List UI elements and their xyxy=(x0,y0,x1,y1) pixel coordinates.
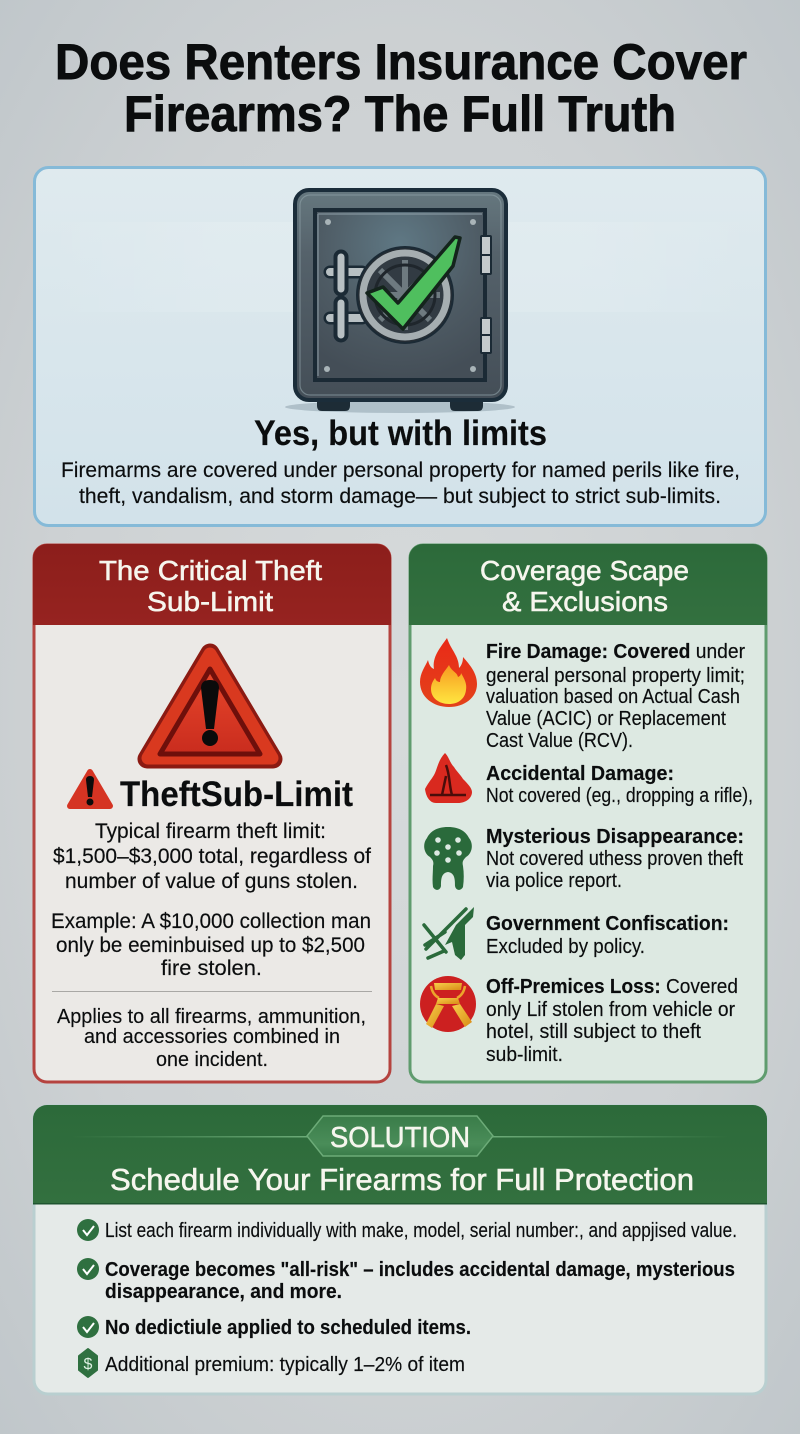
item: off-premises loss xyxy=(420,976,738,1066)
text block: coverage summary: Firemarms are covered under personal property for named perils like fire, xyxy=(61,458,740,482)
icon: broken rifle flame xyxy=(425,753,472,803)
icon: check xyxy=(77,1258,99,1280)
text block: coverage summary xyxy=(61,458,740,508)
icon: check xyxy=(77,1316,99,1338)
item: mysterious disappearance xyxy=(424,826,744,892)
text block: example: only be eeminbuised up to $2,500 xyxy=(56,934,365,957)
icon: large warning triangle xyxy=(147,653,273,759)
panel: solution xyxy=(33,1105,767,1394)
text block: applies to all: and accessories combined in xyxy=(84,1026,340,1048)
text block: typical limit xyxy=(53,820,371,893)
icon: crossed rifle xyxy=(424,907,474,960)
item: mysterious disappearance: via police report. xyxy=(486,870,622,892)
list item: all-risk coverage xyxy=(77,1258,735,1303)
text block: example xyxy=(51,910,371,980)
text block: typical limit: Typical firearm theft limit: xyxy=(95,820,326,843)
item: fire damage: Cast Value (RCV). xyxy=(486,730,633,752)
title: Does Renters Insurance Cover xyxy=(55,34,747,90)
icon: dollar badge xyxy=(79,1349,97,1377)
panel: coverage scope and exclusions xyxy=(409,544,767,1082)
heading: coverage scope xyxy=(480,555,689,617)
item: fire damage: Fire Damage: Covered under xyxy=(486,641,745,663)
item: accidental damage: Accidental Damage: xyxy=(486,763,674,785)
list item: all-risk coverage: disappearance, and more. xyxy=(105,1280,342,1303)
icon: red circle with gold emblem xyxy=(420,976,476,1032)
title: Firearms? The Full Truth xyxy=(124,86,676,142)
heading: critical theft sub-limit: The Critical Theft xyxy=(99,555,322,586)
item: off-premises loss: only Lif stolen from vehicle or xyxy=(486,999,735,1021)
item: off-premises loss: hotel, still subject to theft xyxy=(486,1021,701,1043)
heading: critical theft sub-limit xyxy=(99,555,322,617)
text block: applies to all: one incident. xyxy=(156,1049,268,1071)
text block: typical limit: $1,500–$3,000 total, regardless of xyxy=(53,845,371,868)
text block: coverage summary: theft, vandalism, and storm damage— but subject to strict sub-limits. xyxy=(79,484,721,508)
heading: coverage scope: Coverage Scape xyxy=(480,555,689,586)
text block: example: fire stolen. xyxy=(161,957,262,980)
icon: small warning triangle xyxy=(70,772,110,806)
text block: applies to all: Applies to all firearms, ammunition, xyxy=(57,1006,366,1028)
panel: yes, but with limits xyxy=(34,168,766,526)
list item: all-risk coverage: Coverage becomes "all-risk" – includes accidental damage, mysterious xyxy=(105,1258,735,1281)
icon: green figure xyxy=(424,827,472,890)
item: off-premises loss: Off-Premices Loss: Covered xyxy=(486,976,738,998)
item: fire damage: Value (ACIC) or Replacement xyxy=(486,708,726,730)
icon: flame xyxy=(420,638,477,707)
item: mysterious disappearance: Not covered uthess proven theft xyxy=(486,848,743,870)
text block: example: Example: A $10,000 collection man xyxy=(51,910,371,933)
item: accidental damage xyxy=(425,753,753,807)
heading: theft sub-limit: TheftSub-Limit xyxy=(120,775,353,814)
item: government confiscation xyxy=(424,907,729,960)
panel: critical theft sub-limit xyxy=(33,544,391,1082)
icon: check xyxy=(77,1219,99,1241)
badge: solution xyxy=(307,1116,493,1156)
item: government confiscation: Excluded by policy. xyxy=(486,936,645,958)
heading: schedule your firearms: Schedule Your Firearms for Full Protection xyxy=(110,1162,694,1197)
icon: safe with check mark xyxy=(285,190,515,413)
item: accidental damage: Not covered (eg., dropping a rifle), xyxy=(486,785,753,807)
item: fire damage: valuation based on Actual Cash xyxy=(486,686,740,708)
item: government confiscation: Government Confiscation: xyxy=(486,913,729,935)
item: mysterious disappearance: Mysterious Disappearance: xyxy=(486,826,744,848)
item: fire damage xyxy=(420,638,745,752)
heading: critical theft sub-limit: Sub-Limit xyxy=(147,586,273,617)
text block: applies to all xyxy=(57,1006,366,1071)
title xyxy=(55,34,747,142)
heading: yes, but with limits: Yes, but with limits xyxy=(254,414,547,453)
list item: no deductible: No dedictiule applied to scheduled items. xyxy=(105,1316,471,1339)
icon: dollar badge: $ xyxy=(84,1356,93,1373)
list item: additional premium: Additional premium: typically 1–2% of item xyxy=(105,1354,465,1376)
item: off-premises loss: sub-limit. xyxy=(486,1044,563,1066)
text block: typical limit: number of value of guns stolen. xyxy=(65,870,358,893)
badge: solution: SOLUTION xyxy=(330,1122,470,1154)
heading: coverage scope: & Exclusions xyxy=(502,586,668,617)
item: fire damage: general personal property limit; xyxy=(486,665,745,687)
